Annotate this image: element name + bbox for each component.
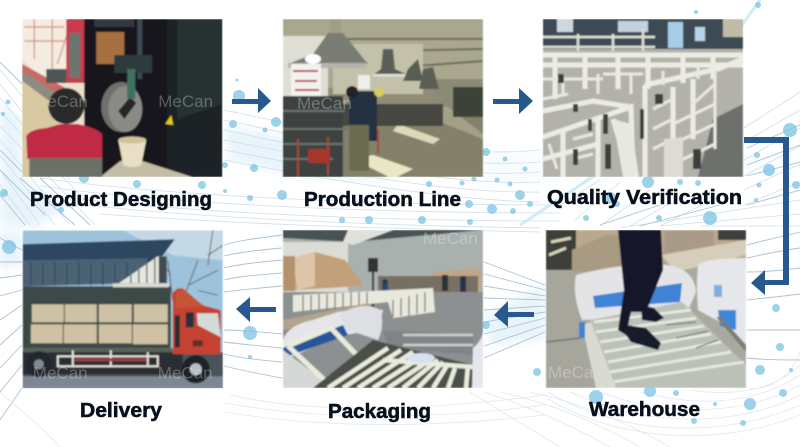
panel: quality verification photo <box>542 19 744 177</box>
arrow: packaging to delivery <box>236 297 276 322</box>
arrow: designing to production <box>232 88 271 113</box>
panel: product designing photo: MeCan <box>158 92 213 111</box>
background line pattern <box>0 70 800 232</box>
panel: delivery photo: MeCan <box>158 363 213 382</box>
panel: product designing photo <box>22 19 222 177</box>
arrow: production to quality <box>493 88 533 114</box>
panel: warehouse photo <box>546 230 746 388</box>
heading: packaging: Packaging <box>328 401 431 423</box>
panel: packaging photo <box>282 229 484 388</box>
panel: warehouse photo: MeCa <box>548 363 594 382</box>
panel: packaging photo: MeCan <box>423 229 478 248</box>
panel: production line photo <box>282 19 484 177</box>
heading: delivery: Delivery <box>80 400 163 422</box>
arrow: warehouse to packaging <box>494 301 534 327</box>
panel: production line photo: MeCan <box>297 94 352 113</box>
panel: delivery photo: MeCan <box>33 363 88 382</box>
arrow: quality to warehouse <box>744 137 789 295</box>
heading: production line: Production Line <box>304 189 461 211</box>
heading: quality verification: Quality Verification <box>547 187 742 209</box>
panel: product designing photo: eCan <box>47 92 88 111</box>
panel: delivery photo <box>22 230 224 388</box>
heading: warehouse: Warehouse <box>589 399 700 421</box>
heading: product designing: Product Designing <box>30 189 212 211</box>
